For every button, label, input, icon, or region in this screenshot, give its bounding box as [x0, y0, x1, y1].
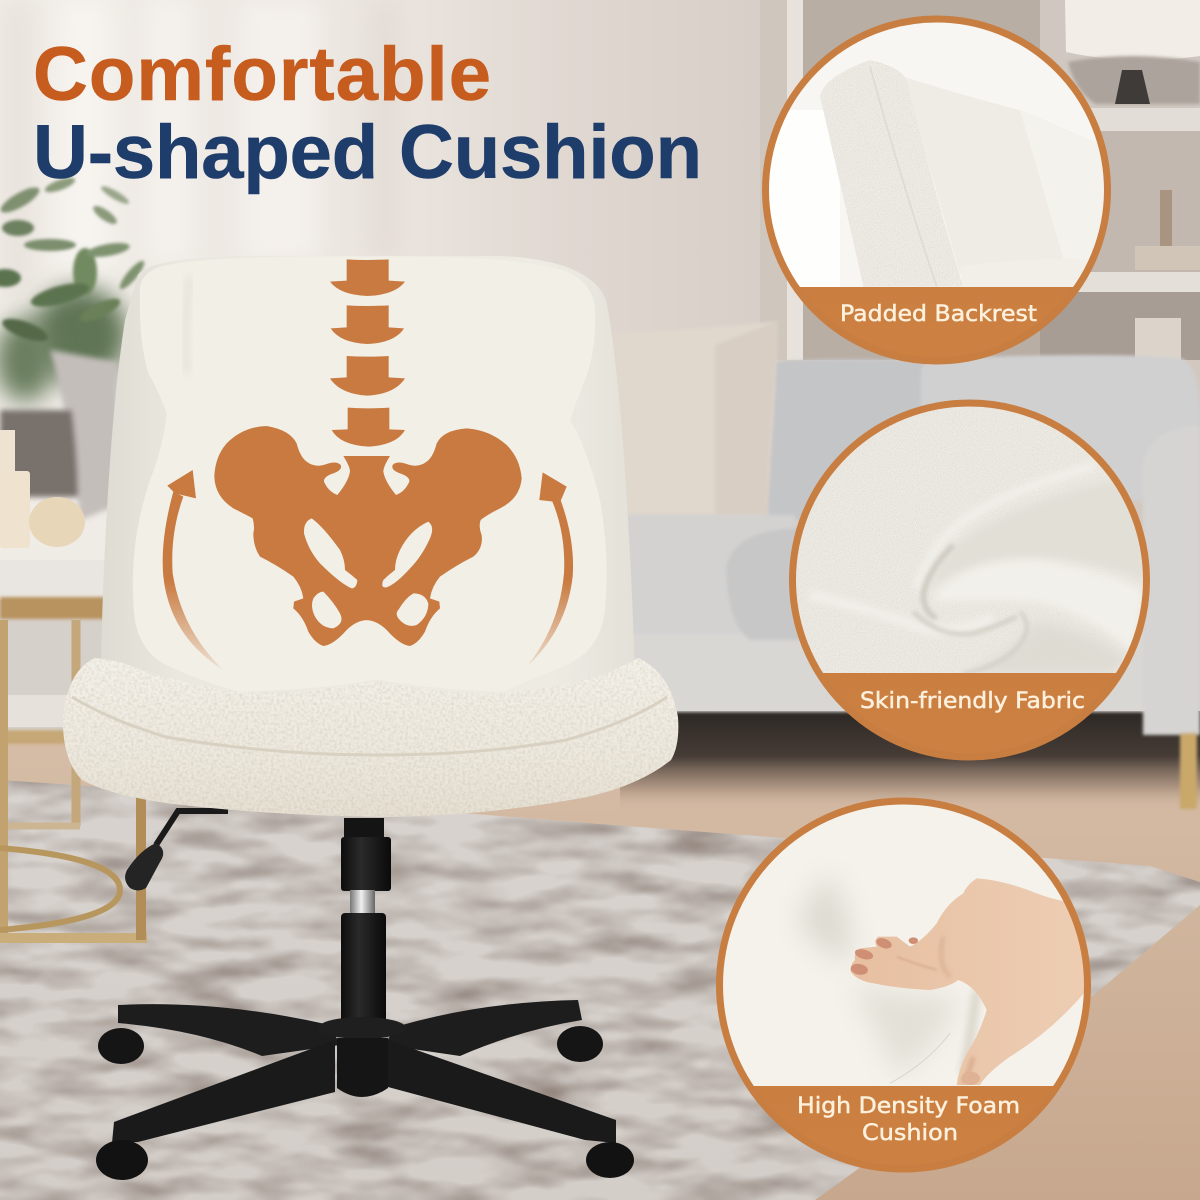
curtain — [0, 0, 400, 300]
table legs — [0, 620, 147, 940]
title — [33, 32, 702, 195]
title line 1: Comfortable — [33, 32, 491, 117]
icon: spine vertebrae — [330, 259, 405, 447]
chair seat — [63, 658, 678, 817]
title line 2: U-shaped Cushion — [33, 110, 702, 195]
pelvis right half — [365, 428, 522, 646]
rug — [0, 780, 1200, 1200]
callout: padded backrest — [755, 10, 1127, 367]
closeup: fabric swirl — [796, 406, 1143, 673]
closeup: chair back — [820, 60, 1104, 287]
lamp — [1065, 0, 1200, 60]
icon: right curved arrow — [527, 472, 573, 667]
gray cushion — [0, 350, 118, 520]
side table and candles — [0, 430, 107, 744]
chair — [63, 256, 678, 1180]
pelvis left half — [214, 426, 368, 646]
closeup: foam and hand — [796, 878, 1084, 1086]
chair base — [96, 811, 634, 1180]
chair backrest — [100, 256, 636, 700]
plant — [0, 175, 147, 402]
label: cushion: Cushion — [862, 1121, 958, 1146]
icon: hand pressing cushion — [851, 878, 1087, 1085]
fingernails — [850, 936, 980, 1085]
label: padded backrest: Padded Backrest — [840, 302, 1037, 327]
sofa — [604, 321, 1200, 809]
icon: left curved arrow — [163, 470, 223, 670]
callout: high density foam cushion — [716, 798, 1091, 1172]
bookshelf — [760, 0, 1200, 360]
callout: skin-friendly fabric — [780, 395, 1160, 765]
seat piping — [72, 697, 667, 755]
icon: pelvis — [214, 426, 522, 646]
label: high density foam: High Density Foam — [797, 1094, 1020, 1119]
label: skin-friendly fabric: Skin-friendly Fabric — [860, 689, 1085, 714]
lumbar cushion — [133, 256, 607, 692]
floor — [0, 730, 1200, 1200]
